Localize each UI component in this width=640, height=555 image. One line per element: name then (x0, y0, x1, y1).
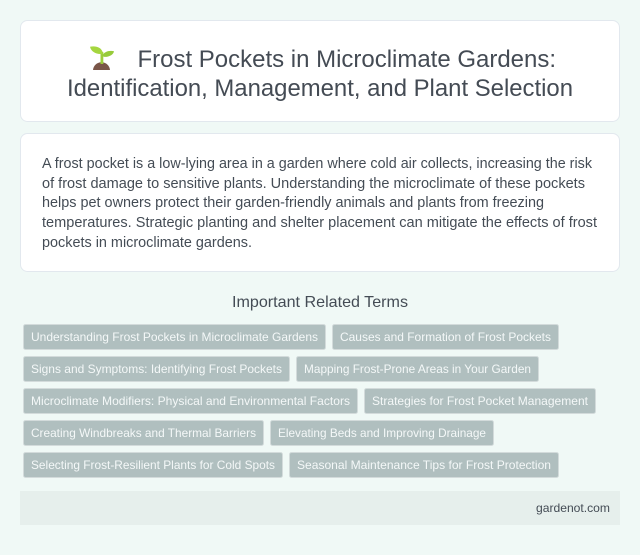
title text: Frost Pockets in Microclimate Gardens: (138, 46, 556, 73)
tag: Elevating Beds and Improving Drainage (278, 426, 486, 440)
paragraph text (42, 156, 597, 251)
tag: Microclimate Modifiers: Physical and Environmental Factors (31, 394, 350, 408)
paragraph text: helps pet owners protect their garden-friendly animals and plants from freezing (42, 195, 544, 211)
tag (364, 388, 596, 414)
tag (24, 388, 358, 414)
panel: title card (20, 20, 620, 122)
tag (332, 324, 558, 350)
paragraph text: of frost damage to sensitive plants. Understanding the microclimate of these pockets (42, 176, 585, 192)
tag (296, 356, 538, 382)
title text (67, 46, 573, 102)
tag: Signs and Symptoms: Identifying Frost Pockets (31, 362, 282, 376)
tag: Creating Windbreaks and Thermal Barriers (31, 426, 256, 440)
tag: Understanding Frost Pockets in Microclimate Gardens (31, 330, 318, 344)
tag: Mapping Frost-Prone Areas in Your Garden (304, 362, 531, 376)
tag: Seasonal Maintenance Tips for Frost Protection (297, 458, 551, 472)
tag: Causes and Formation of Frost Pockets (340, 330, 551, 344)
paragraph text: pockets in microclimate gardens. (42, 235, 252, 251)
paragraph text: temperatures. Strategic planting and shelter placement can mitigate the effects of frost (42, 215, 597, 231)
footer (20, 491, 620, 525)
footer source text: gardenot.com (536, 501, 610, 515)
heading: important related terms: Important Related Terms (232, 294, 408, 311)
tag (24, 356, 290, 382)
panel: introduction paragraph (20, 134, 620, 272)
title text: Identification, Management, and Plant Selection (67, 75, 573, 102)
tag: Selecting Frost-Resilient Plants for Cold Spots (31, 458, 275, 472)
tag (270, 420, 494, 446)
paragraph text: A frost pocket is a low-lying area in a garden where cold air collects, increasing the risk (42, 156, 593, 172)
tag (24, 452, 282, 478)
tag (24, 420, 264, 446)
icon: sprout (90, 46, 114, 70)
tag: Strategies for Frost Pocket Management (372, 394, 589, 408)
tag (24, 324, 326, 350)
related terms tags (24, 324, 596, 478)
tag (290, 452, 558, 478)
